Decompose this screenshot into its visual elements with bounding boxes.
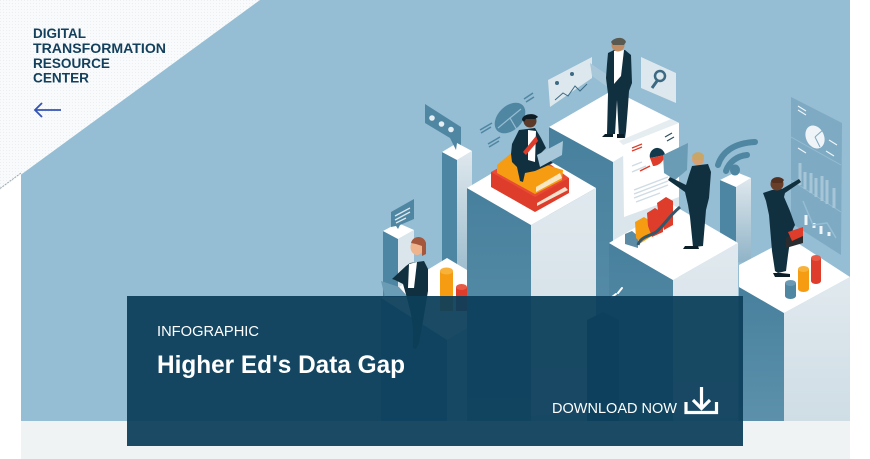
icon: red cylinder — [456, 284, 467, 311]
heading: section name: TRANSFORMATION — [33, 41, 166, 56]
icon: bubble chart card top — [548, 57, 592, 107]
chart: 3D bars with trend line — [625, 197, 680, 248]
icon: red and black briefcase — [786, 227, 803, 248]
pillar: wifi — [720, 172, 751, 263]
heading: section name: RESOURCE — [33, 56, 110, 71]
person: woman seated with laptop — [381, 237, 428, 349]
icon: cylinders trio — [785, 255, 821, 299]
background: grey floor strip — [21, 421, 850, 459]
pillar: person with laptop — [609, 205, 738, 421]
pillar: tall with dots bubble — [442, 143, 472, 300]
pillar: back, top standing person — [549, 90, 679, 421]
label: infographic: INFOGRAPHIC — [157, 324, 259, 340]
heading: section name: CENTER — [33, 70, 89, 86]
icon: back arrow — [35, 103, 61, 117]
heading: section name: DIGITAL — [33, 26, 86, 41]
pillar: right — [739, 238, 850, 421]
person: pointing at dashboard — [763, 177, 801, 277]
icon: download — [686, 387, 716, 412]
books: stacked red and orange — [491, 150, 569, 212]
pillar: low with cylinders — [381, 258, 467, 421]
label: download now: DOWNLOAD NOW — [552, 401, 677, 417]
document: report sheet — [619, 119, 679, 217]
icon: orange cylinder — [440, 268, 453, 311]
person: seated on books with laptop — [511, 114, 563, 182]
small marks on pillar behind banner — [587, 288, 622, 421]
icon: speech bubble with three dots — [425, 104, 461, 150]
icon: magnifier card — [641, 57, 676, 103]
heading: section name — [33, 26, 166, 86]
panel: banner overlay — [127, 296, 743, 446]
person: top standing with tablet — [590, 38, 632, 138]
panel: dotted corner triangle — [0, 0, 260, 190]
pillar: left small with speech bubble — [383, 223, 414, 330]
pillar: centre big — [467, 150, 596, 421]
icon: wifi signal — [718, 142, 755, 174]
icon: small speech bubble — [391, 199, 414, 229]
heading: report title: Higher Ed's Data Gap — [157, 351, 405, 379]
person: standing with laptop — [663, 143, 711, 249]
panel: translucent dashboard wall — [791, 97, 842, 255]
icon: pie chart with callouts — [480, 93, 534, 147]
